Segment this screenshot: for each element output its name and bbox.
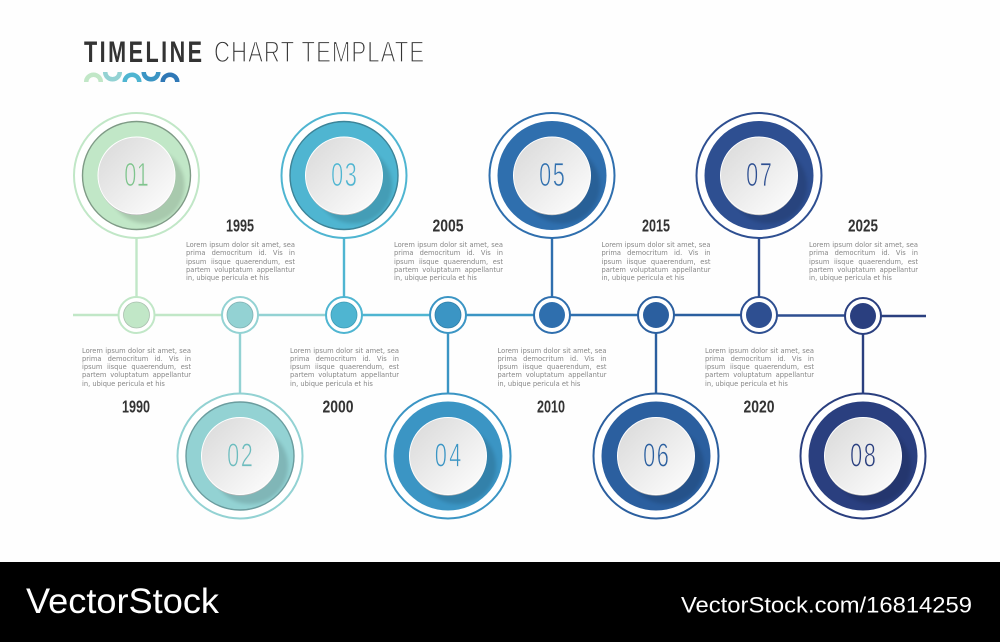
text block 2020: Lorem ipsum dolor sit amet, sea — [705, 346, 814, 354]
text block 2005: in, ubique pericula et his — [394, 274, 477, 282]
circle badge 07 — [696, 113, 822, 238]
text block 2020: ipsum iisque quaerendum, est — [705, 363, 814, 371]
title: TIMELINE — [84, 34, 202, 69]
connector 02 — [239, 333, 241, 393]
circle badge 03 — [282, 113, 406, 238]
text block 2025: prima democritum id. Vis in — [809, 249, 918, 257]
footer band — [0, 562, 1000, 642]
text block 2010 — [498, 346, 606, 388]
text block 1990 — [82, 346, 191, 388]
node 8 — [845, 298, 881, 334]
text block 2010: Lorem ipsum dolor sit amet, sea — [498, 346, 606, 354]
year 2025: 2025 — [848, 216, 878, 236]
node 4 — [430, 297, 466, 333]
circle badge 06: 06 — [643, 437, 669, 474]
node 1 — [118, 297, 154, 333]
connector 03 — [343, 238, 345, 297]
year 1995: 1995 — [226, 216, 254, 236]
text block 2015 — [602, 241, 710, 282]
text block 1995: Lorem ipsum dolor sit amet, sea — [186, 241, 295, 249]
node 2 — [222, 297, 258, 333]
year 2010: 2010 — [537, 396, 565, 416]
text block 2020 — [705, 346, 814, 388]
text block 1995: in, ubique pericula et his — [186, 274, 269, 282]
footer band: VectorStock.com/16814259 — [681, 592, 972, 618]
text block 2005: partem voluptatum appellantur — [394, 266, 503, 274]
text block 2015: partem voluptatum appellantur — [602, 266, 710, 274]
circle badge 07: 07 — [746, 156, 772, 193]
text block 2000: Lorem ipsum dolor sit amet, sea — [290, 346, 399, 354]
text block 2025: Lorem ipsum dolor sit amet, sea — [809, 241, 918, 249]
text block 2010: prima democritum id. Vis in — [498, 355, 606, 363]
connector 01 — [135, 238, 138, 297]
text block 2015: in, ubique pericula et his — [602, 274, 684, 282]
circle badge 02 — [178, 394, 302, 518]
connector 07 — [758, 238, 760, 297]
text block 2000: prima democritum id. Vis in — [290, 355, 399, 363]
text block 2025: partem voluptatum appellantur — [809, 266, 918, 274]
circle badge 04: 04 — [435, 437, 461, 474]
node 6 — [638, 297, 674, 333]
title — [84, 34, 424, 69]
text block 1990: ipsum iisque quaerendum, est — [82, 363, 191, 371]
text block 2005: prima democritum id. Vis in — [394, 249, 503, 257]
circle badge 05 — [490, 113, 614, 238]
circle badge 04 — [386, 394, 510, 518]
text block 2005 — [394, 241, 503, 282]
title: CHART TEMPLATE — [214, 35, 424, 69]
circle badge 03: 03 — [331, 156, 357, 193]
circle badge 02: 02 — [227, 437, 253, 474]
year 2005: 2005 — [432, 216, 464, 236]
text block 2010: partem voluptatum appellantur — [498, 371, 606, 379]
text block 2005: ipsum iisque quaerendum, est — [394, 258, 503, 266]
text block 2020: partem voluptatum appellantur — [705, 371, 814, 379]
year 2015: 2015 — [642, 216, 670, 236]
text block 2000: in, ubique pericula et his — [290, 380, 373, 388]
year 2000: 2000 — [322, 396, 354, 416]
text block 2025: in, ubique pericula et his — [809, 274, 892, 282]
text block 2000: partem voluptatum appellantur — [290, 371, 399, 379]
text block 1990: Lorem ipsum dolor sit amet, sea — [82, 346, 191, 354]
year 1990: 1990 — [122, 396, 150, 416]
text block 2020: prima democritum id. Vis in — [705, 355, 814, 363]
connector 04 — [447, 333, 449, 393]
circle badge 01: 01 — [124, 156, 149, 193]
text block 2000 — [290, 346, 399, 388]
footer band: VectorStock — [26, 582, 220, 621]
text block 2025: ipsum iisque quaerendum, est — [809, 258, 918, 266]
year 2020: 2020 — [744, 396, 775, 416]
node 3 — [326, 297, 362, 333]
text block 2010: in, ubique pericula et his — [498, 380, 580, 388]
text block 2020: in, ubique pericula et his — [705, 380, 788, 388]
text block 2015: prima democritum id. Vis in — [602, 249, 710, 257]
text block 1995: prima democritum id. Vis in — [186, 249, 295, 257]
circle badge 01 — [74, 113, 199, 238]
text block 1990: in, ubique pericula et his — [82, 380, 165, 388]
text block 2025 — [809, 241, 918, 282]
timeline axis — [73, 315, 926, 316]
circle badge 08 — [800, 394, 926, 518]
text block 1990: prima democritum id. Vis in — [82, 355, 191, 363]
connector 05 — [551, 238, 553, 297]
text block 2000: ipsum iisque quaerendum, est — [290, 363, 399, 371]
node 7 — [741, 297, 777, 333]
connector 06 — [655, 333, 657, 393]
text block 1995 — [186, 241, 295, 282]
text block 1990: partem voluptatum appellantur — [82, 371, 191, 379]
text block 1995: partem voluptatum appellantur — [186, 266, 295, 274]
node 5 — [534, 297, 570, 333]
circle badge 06 — [594, 394, 718, 518]
text block 2010: ipsum iisque quaerendum, est — [498, 363, 606, 371]
connector 08 — [862, 334, 864, 393]
text block 2015: ipsum iisque quaerendum, est — [602, 258, 710, 266]
icon: wave ornament — [84, 72, 180, 82]
text block 1995: ipsum iisque quaerendum, est — [186, 258, 295, 266]
text block 2015: Lorem ipsum dolor sit amet, sea — [602, 241, 710, 249]
circle badge 08: 08 — [850, 437, 876, 474]
text block 2005: Lorem ipsum dolor sit amet, sea — [394, 241, 503, 249]
circle badge 05: 05 — [539, 156, 565, 193]
